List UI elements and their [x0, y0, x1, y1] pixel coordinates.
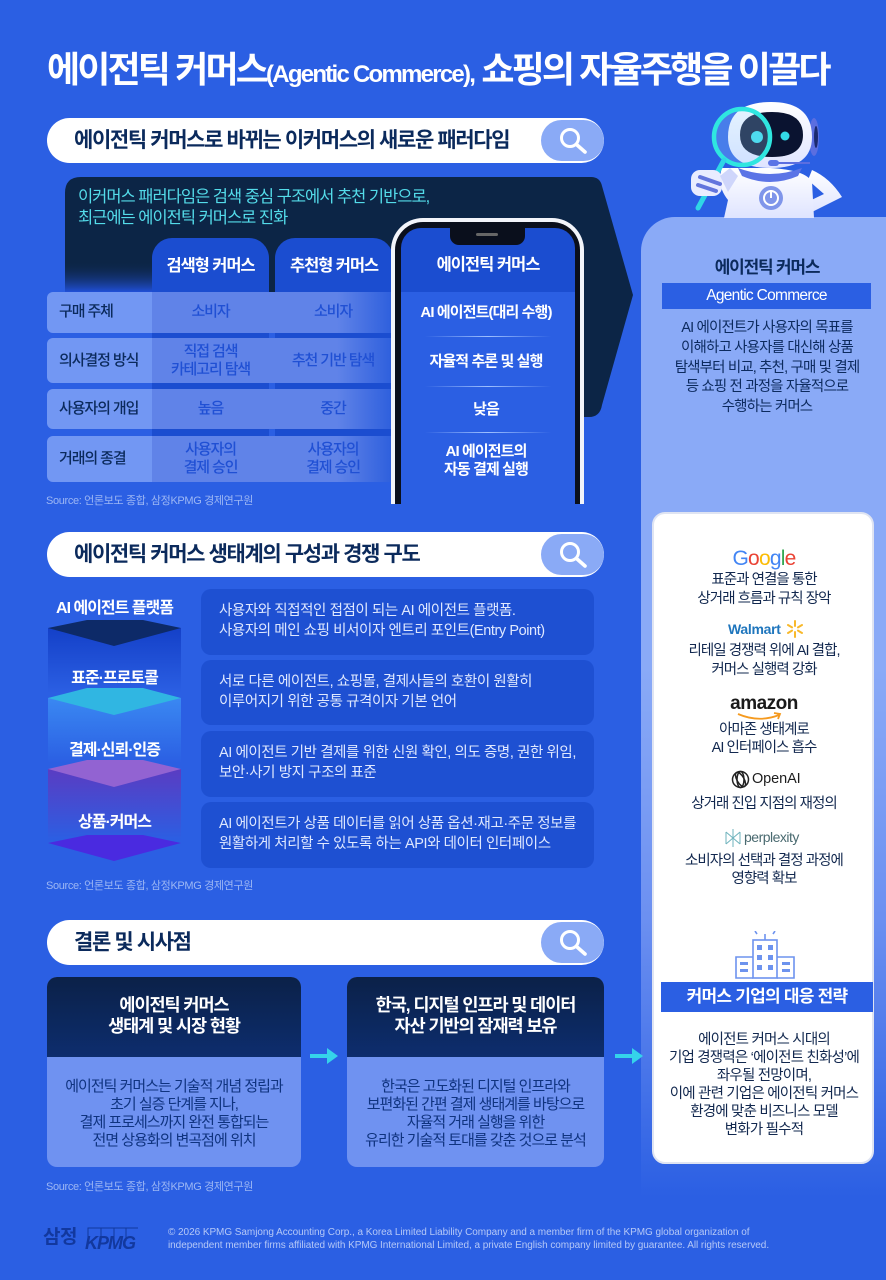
- definition text: 이해하고 사용자를 대신해 상품: [681, 340, 853, 356]
- row: decision: [47, 338, 391, 383]
- strategy text: 좌우될 전망이며,: [717, 1068, 811, 1084]
- logo: perplexity: perplexity: [744, 829, 799, 845]
- title: 에이전틱 커머스(Agentic Commerce), 쇼핑의 자율주행을 이끌다: [47, 49, 829, 90]
- card: Korea potential: 자산 기반의 잠재력 보유: [395, 1016, 556, 1036]
- card: Korea potential: 유리한 기술적 토대를 갖춘 것으로 분석: [365, 1132, 586, 1149]
- phone row 3: 낮음: [473, 401, 499, 418]
- icon: search: [541, 534, 604, 575]
- text: perplexity: 소비자의 선택과 결정 과정에: [685, 853, 843, 869]
- copyright: independent member firms affiliated with KPMG International Limited, a private English company limited by guarantee. All rights reserved.: [168, 1240, 769, 1250]
- strategy text: 기업 경쟁력은 ‘에이전트 친화성’에: [669, 1050, 859, 1066]
- definition text: 탐색부터 비교, 추천, 구매 및 결제: [675, 360, 859, 376]
- text: perplexity: [685, 852, 843, 887]
- row: buyer: 소비자: [191, 303, 230, 320]
- phone screen: [401, 228, 575, 504]
- card: ecosystem status: 결제 프로세스까지 완전 통합되는: [80, 1114, 268, 1131]
- card: ecosystem status: 에이전틱 커머스는 기술적 개념 정립과: [65, 1078, 283, 1095]
- intro text: 이커머스 패러다임은 검색 중심 구조에서 추천 기반으로,: [78, 188, 429, 206]
- icon: office building: [735, 931, 795, 979]
- phone heading: 에이전틱 커머스: [437, 256, 539, 274]
- text: Walmart: 커머스 실행력 강화: [711, 662, 817, 678]
- description: commerce: AI 에이전트가 상품 데이터를 읽어 상품 옵션·재고·주문 정보를: [219, 816, 576, 832]
- section heading: ecosystem: 에이전틱 커머스 생태계의 구성과 경쟁 구도: [74, 543, 419, 566]
- panel: white company card: [652, 512, 874, 1164]
- description: commerce: [201, 802, 594, 868]
- row: decision: 직접 검색: [184, 343, 237, 360]
- text: amazon: 아마존 생태계로: [719, 722, 809, 738]
- logo: Samjong KPMG: 삼정: [43, 1227, 77, 1248]
- icon: search: [541, 120, 604, 161]
- column header: recommendation commerce: 추천형 커머스: [290, 257, 378, 275]
- row: decision: 카테고리 탐색: [171, 361, 250, 378]
- illustration: robot with magnifier: [691, 102, 842, 218]
- text: OpenAI: 상거래 진입 지점의 재정의: [691, 796, 837, 812]
- text: perplexity: 영향력 확보: [731, 871, 797, 887]
- source: Source: 언론보도 종합, 삼정KPMG 경제연구원: [46, 1181, 253, 1193]
- section heading: ecosystem: [47, 532, 604, 577]
- row: closing: [47, 436, 391, 482]
- logo: OpenAI: OpenAI: [752, 771, 801, 787]
- row: decision: 의사결정 방식: [59, 352, 138, 369]
- text: amazon: [712, 722, 817, 756]
- card: ecosystem status: [47, 977, 301, 1167]
- row: user involvement: 사용자의 개입: [59, 400, 138, 417]
- source: Source: 언론보도 종합, 삼정KPMG 경제연구원: [46, 495, 253, 507]
- strategy text: [669, 1032, 859, 1138]
- card: ecosystem status: 초기 실증 단계를 지나,: [110, 1096, 238, 1113]
- row: closing: 사용자의: [308, 441, 358, 458]
- right panel background: [641, 217, 886, 1217]
- row: user involvement: 중간: [320, 400, 346, 417]
- card: Korea potential: 한국은 고도화된 디지털 인프라와: [381, 1078, 570, 1095]
- description: payment: [201, 731, 594, 797]
- row: decision: 추천 기반 탐색: [292, 352, 374, 369]
- logo: OpenAI: [732, 770, 801, 788]
- section heading: conclusion: [47, 920, 604, 965]
- description: protocol: 이루어지기 위한 공통 규격이자 기본 언어: [219, 694, 457, 710]
- text: amazon: AI 인터페이스 흡수: [712, 740, 816, 756]
- text: Walmart: 리테일 경쟁력 위에 AI 결합,: [688, 643, 840, 659]
- copyright: © 2026 KPMG Samjong Accounting Corp., a Korea Limited Liability Company and a member firm of the KPMG global organization of: [168, 1227, 749, 1238]
- row: user involvement: [47, 389, 391, 429]
- column header: search commerce: 검색형 커머스: [167, 257, 254, 275]
- row: closing: 사용자의: [185, 441, 236, 458]
- definition heading: 에이전틱 커머스: [715, 258, 819, 277]
- panel: paradigm comparison: [47, 177, 633, 504]
- definition text: 수행하는 커머스: [722, 399, 812, 415]
- description: protocol: 서로 다른 에이전트, 쇼핑몰, 결제사들의 호환이 원활히: [219, 674, 532, 690]
- description: agent platform: 사용자와 직접적인 접점이 되는 AI 에이전트 플랫폼.: [219, 603, 516, 619]
- card: Korea potential: 한국, 디지털 인프라 및 데이터: [376, 995, 575, 1015]
- logo: perplexity: [726, 829, 800, 847]
- layer label: agent platform: AI 에이전트 플랫폼: [56, 600, 173, 617]
- card: ecosystem status: 생태계 및 시장 현황: [108, 1016, 240, 1036]
- row: buyer: [47, 292, 391, 333]
- card: ecosystem status: 에이전틱 커머스: [119, 995, 229, 1015]
- row: user involvement: 높음: [198, 400, 223, 417]
- icon: search: [541, 922, 604, 963]
- card: Korea potential: 자율적 거래 실행을 위한: [407, 1114, 544, 1131]
- intro text: 최근에는 에이전틱 커머스로 진화: [78, 208, 287, 226]
- description: payment: AI 에이전트 기반 결제를 위한 신원 확인, 의도 증명, 권한 위임,: [219, 745, 576, 761]
- phone row 2: 자율적 추론 및 실행: [429, 353, 542, 370]
- row: buyer: 구매 주체: [59, 303, 113, 320]
- section heading: paradigm: 에이전틱 커머스로 바뀌는 이커머스의 새로운 패러다임: [74, 129, 509, 152]
- intro text: [78, 188, 429, 226]
- layer label: payment: 결제·신뢰·인증: [69, 742, 160, 759]
- text: Google: 상거래 흐름과 규칙 장악: [697, 591, 831, 607]
- phone row 4: [444, 443, 528, 478]
- card: Korea potential: [347, 977, 604, 1167]
- phone notch: [450, 228, 525, 245]
- strategy heading band: [661, 982, 873, 1012]
- copyright: [168, 1227, 769, 1250]
- arrow: [310, 1048, 338, 1064]
- phone row 4: 자동 결제 실행: [444, 461, 528, 478]
- row: closing: 결제 승인: [306, 459, 360, 476]
- logo: Walmart: [728, 620, 803, 638]
- logo: amazon: amazon: [730, 693, 798, 714]
- dark arrow panel: [65, 177, 633, 417]
- card: ecosystem status: 전면 상용화의 변곡점에 위치: [92, 1132, 256, 1149]
- section heading: paradigm: [47, 118, 604, 163]
- logo: Google: Google: [732, 547, 795, 570]
- strategy text: 변화가 필수적: [725, 1122, 803, 1138]
- phone row 1: AI 에이전트(대리 수행): [420, 304, 552, 321]
- card: Korea potential: 보편화된 간편 결제 생태계를 바탕으로: [367, 1096, 584, 1113]
- row: buyer: 소비자: [314, 303, 352, 320]
- strategy text: 이에 관련 기업은 에이전틱 커머스: [670, 1086, 858, 1102]
- logo: Walmart: Walmart: [728, 621, 781, 637]
- arrow: [615, 1048, 643, 1064]
- source: Source: 언론보도 종합, 삼정KPMG 경제연구원: [46, 880, 253, 892]
- description: protocol: [201, 660, 594, 725]
- strategy text: 에이전트 커머스 시대의: [698, 1032, 830, 1048]
- section heading: conclusion: 결론 및 시사점: [74, 931, 191, 954]
- description: agent platform: 사용자의 메인 쇼핑 비서이자 엔트리 포인트(Entry Point): [219, 622, 545, 638]
- column header: recommendation commerce: [275, 238, 393, 482]
- row: closing: 결제 승인: [184, 459, 237, 476]
- layer label: commerce: 상품·커머스: [78, 814, 151, 831]
- diagram: layered stack: [48, 599, 181, 861]
- strategy heading band: 커머스 기업의 대응 전략: [687, 987, 847, 1006]
- layer label: protocol: 표준·프로토콜: [71, 670, 158, 687]
- stack shapes: [48, 620, 181, 861]
- text: Google: [697, 572, 831, 607]
- panel: agentic commerce definition: [662, 258, 871, 415]
- description: commerce: 원활하게 처리할 수 있도록 하는 API와 데이터 인터페이스: [219, 836, 551, 852]
- text: Walmart: [688, 642, 840, 678]
- text: Google: 표준과 연결을 통한: [711, 572, 817, 588]
- logo: Samjong KPMG: KPMG: [85, 1233, 135, 1253]
- panel: layer descriptions: [201, 589, 594, 868]
- column header: search commerce: [152, 238, 269, 482]
- description: payment: 보안·사기 방지 구조의 표준: [219, 764, 376, 780]
- phone row 4: AI 에이전트의: [446, 443, 526, 460]
- row: closing: 거래의 종결: [59, 450, 126, 467]
- definition text: AI 에이전트가 사용자의 목표를: [681, 320, 853, 336]
- logo: Samjong KPMG: [43, 1227, 138, 1253]
- strategy text: 환경에 맞춘 비즈니스 모델: [690, 1104, 838, 1120]
- phone mockup: agentic commerce: [391, 218, 584, 504]
- definition text: [675, 320, 859, 415]
- english label band: [662, 283, 871, 309]
- description: agent platform: [201, 589, 594, 655]
- definition text: 등 쇼핑 전 과정을 자율적으로: [686, 379, 848, 395]
- english label band: Agentic Commerce: [706, 287, 827, 304]
